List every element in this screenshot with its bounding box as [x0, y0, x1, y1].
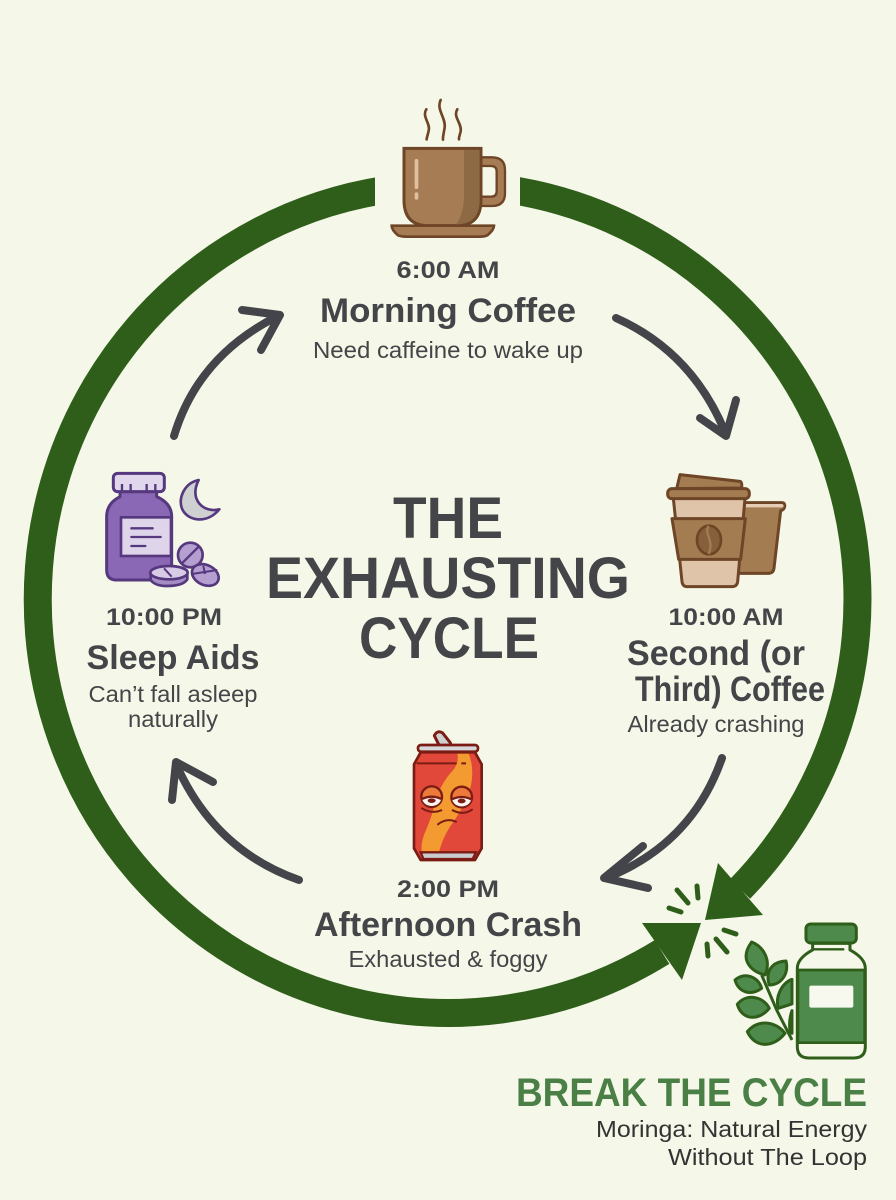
arrow: morning coffee to second coffee: [616, 318, 736, 436]
text: sleep aids step: 10:00 PM: [106, 604, 222, 631]
text: second coffee step: Already crashing: [628, 711, 804, 737]
title: EXHAUSTING: [266, 546, 630, 611]
text: second coffee step: Second (or: [627, 634, 805, 673]
arrow: afternoon crash to sleep aids: [172, 762, 299, 880]
icon: takeaway coffee cups: [668, 475, 785, 587]
text: sleep aids step: [86, 604, 260, 732]
text: morning coffee step: [313, 257, 583, 363]
text: sleep aids step: Sleep Aids: [86, 639, 260, 677]
callout: break the cycle: BREAK THE CYCLE: [516, 1071, 867, 1115]
text: second coffee step: [627, 604, 825, 737]
text: second coffee step: 10:00 AM: [668, 604, 784, 631]
icon: steaming coffee cup: [392, 100, 505, 237]
arrow: second coffee to afternoon crash: [604, 758, 722, 888]
icon: sleep aid bottle, moon and pills: [107, 473, 222, 590]
break sparks: [669, 886, 736, 956]
icon: moringa branch and supplement bottle: [735, 924, 865, 1058]
title: THE: [393, 486, 503, 551]
text: morning coffee step: 6:00 AM: [396, 257, 500, 284]
callout: break the cycle: Without The Loop: [668, 1144, 867, 1170]
callout: break the cycle: Moringa: Natural Energy: [596, 1116, 868, 1142]
text: second coffee step: Third) Coffee: [635, 670, 825, 709]
text: sleep aids step: naturally: [128, 706, 219, 732]
text: morning coffee step: Morning Coffee: [320, 292, 576, 330]
title: CYCLE: [359, 606, 539, 671]
icon: can with tired face: [414, 732, 482, 860]
text: morning coffee step: Need caffeine to wake up: [313, 337, 583, 363]
arrow: sleep aids to morning coffee: [174, 310, 280, 436]
callout: break the cycle: [516, 1071, 868, 1170]
text: afternoon crash step: 2:00 PM: [397, 876, 499, 903]
text: afternoon crash step: Exhausted & foggy: [348, 946, 548, 972]
title: [266, 486, 630, 671]
green ring arrow: counter-clockwise from top to break point: [38, 189, 701, 1013]
green ring arrow: clockwise from top to break point: [505, 189, 857, 920]
text: afternoon crash step: Afternoon Crash: [314, 906, 582, 944]
text: sleep aids step: Can’t fall asleep: [88, 681, 258, 707]
text: afternoon crash step: [314, 876, 582, 972]
